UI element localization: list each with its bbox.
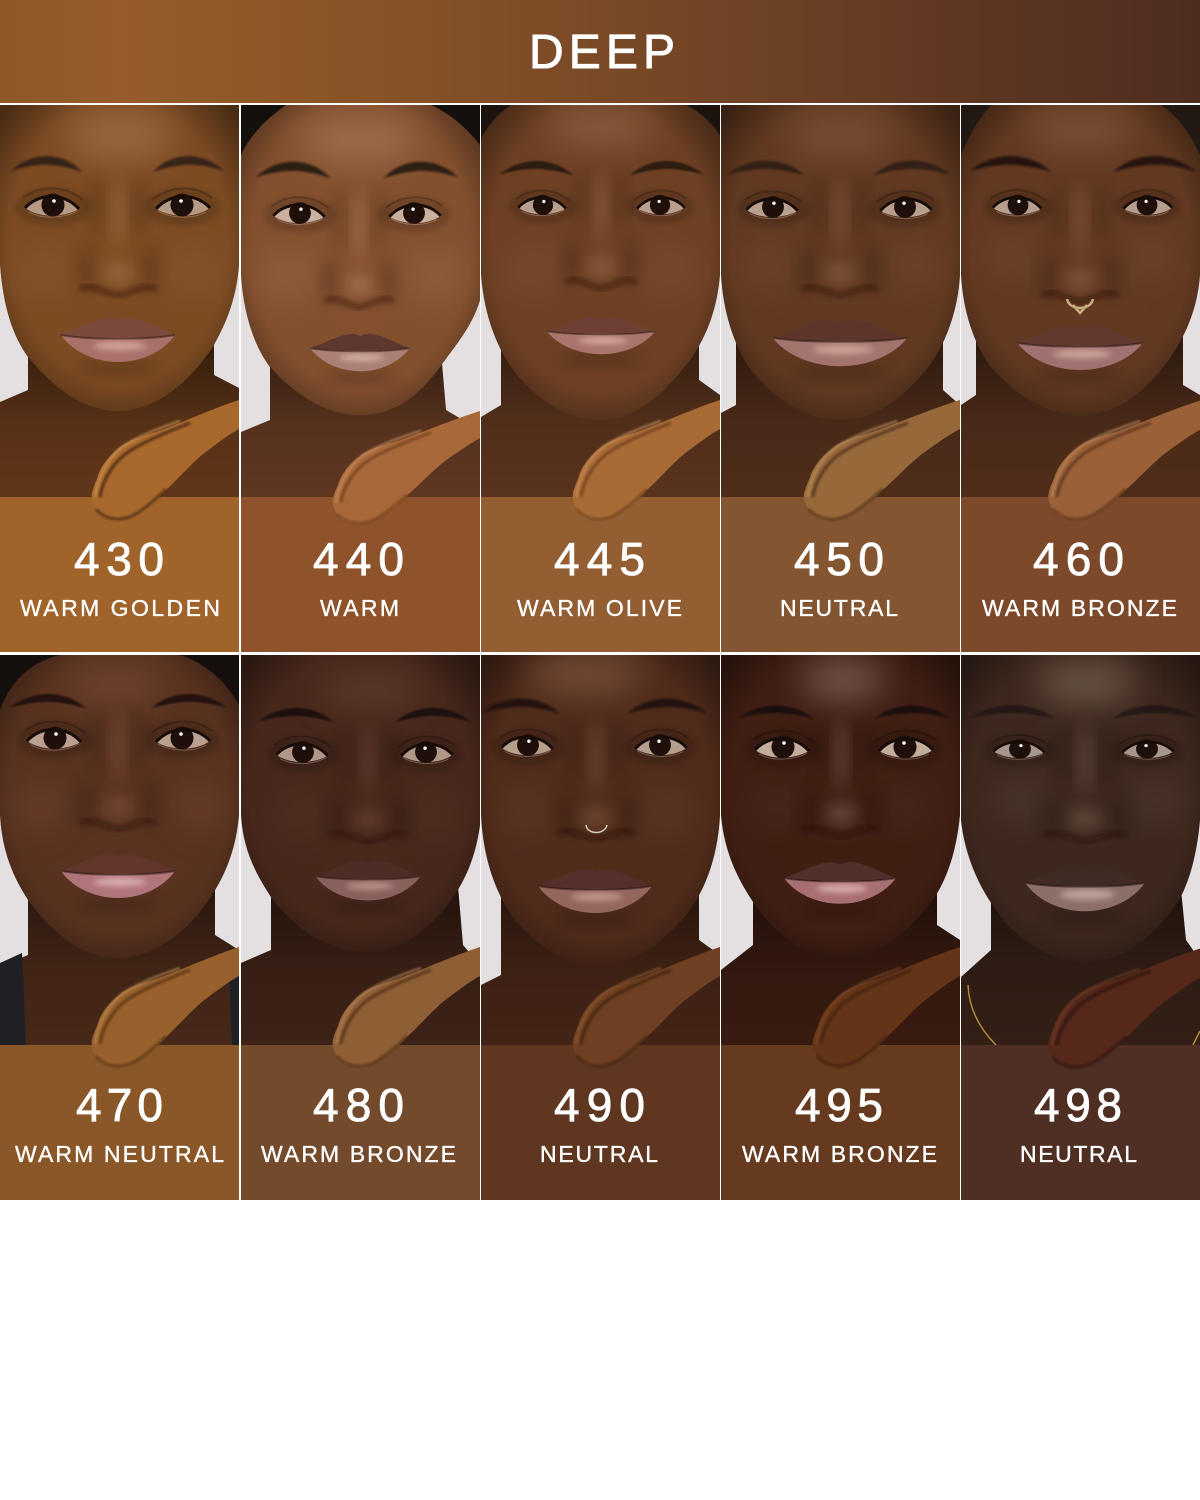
lips	[310, 334, 410, 383]
panel: shade 450	[721, 105, 960, 652]
shade number: 440	[313, 533, 404, 585]
photo: model 460	[961, 105, 1200, 497]
product swatch	[333, 411, 480, 524]
shade number: 495	[795, 1079, 883, 1131]
shade colour block	[241, 1045, 480, 1200]
product swatch	[813, 947, 960, 1067]
product swatch	[1048, 400, 1200, 520]
necklace	[968, 985, 1200, 1045]
hair	[0, 655, 239, 710]
hair	[961, 105, 1200, 155]
panel: shade 440	[241, 105, 480, 652]
hair	[481, 105, 720, 139]
nose	[554, 721, 638, 839]
panel: shade 460	[961, 105, 1200, 652]
shade colour block	[481, 1045, 720, 1200]
photo: model 480	[241, 655, 480, 1047]
shade number: 430	[74, 533, 164, 585]
panel: shade 430	[0, 105, 239, 652]
panel: shade 490	[481, 655, 720, 1200]
garment	[0, 947, 239, 1047]
shade number: 445	[554, 533, 645, 585]
lips	[547, 317, 655, 366]
lips	[784, 862, 896, 917]
shade colour block	[961, 1045, 1200, 1200]
shade undertone: NEUTRAL	[1020, 1141, 1137, 1167]
shade undertone: WARM BRONZE	[982, 595, 1177, 621]
photo: model 430	[0, 105, 239, 497]
shade number: 490	[554, 1079, 645, 1131]
shade colour block	[481, 497, 720, 652]
product swatch	[92, 947, 239, 1067]
shade number: 498	[1034, 1079, 1122, 1131]
eyes and brows	[256, 162, 458, 233]
shade undertone: WARM NEUTRAL	[15, 1141, 224, 1167]
photo: model 450	[721, 105, 960, 497]
shade colour block	[961, 497, 1200, 652]
shade number: 460	[1033, 533, 1124, 585]
eyes and brows	[11, 156, 224, 226]
photo: model 440	[241, 105, 480, 497]
panel: shade 470	[0, 655, 239, 1200]
nose	[1038, 183, 1122, 301]
photo: model 495	[721, 655, 960, 1047]
shade undertone: WARM BRONZE	[742, 1141, 937, 1167]
product swatch	[333, 947, 480, 1067]
nose	[798, 177, 882, 295]
panel: shade 480	[241, 655, 480, 1200]
product swatch	[1048, 948, 1200, 1068]
lips	[61, 318, 175, 376]
nose	[76, 177, 160, 295]
nose ring	[586, 825, 607, 832]
eyes and brows	[500, 161, 703, 223]
shade colour block	[241, 497, 480, 652]
eyes and brows	[970, 156, 1195, 224]
lips	[1017, 326, 1143, 384]
eyes and brows	[728, 161, 950, 227]
shade undertone: WARM GOLDEN	[20, 595, 220, 621]
eyes and brows	[482, 699, 706, 765]
shade undertone: WARM BRONZE	[261, 1141, 456, 1167]
product swatch	[92, 400, 239, 520]
product swatch	[804, 400, 960, 520]
eyes and brows	[11, 694, 226, 759]
shade undertone: WARM	[320, 595, 399, 621]
nose	[1040, 723, 1130, 841]
header band: DEEP	[0, 0, 1200, 103]
photo: model 470	[0, 655, 239, 1047]
nose	[326, 723, 410, 841]
shade undertone: WARM OLIVE	[517, 595, 682, 621]
lips	[773, 320, 907, 381]
photo: model 445	[481, 105, 720, 497]
shade colour block	[721, 497, 960, 652]
eyes and brows	[739, 705, 949, 768]
panel: shade 445	[481, 105, 720, 652]
product swatch	[573, 947, 720, 1067]
shade colour block	[0, 1045, 239, 1200]
lips	[1025, 865, 1145, 926]
lips	[316, 861, 420, 913]
hair	[241, 105, 480, 155]
nose ring	[1067, 299, 1093, 313]
nose	[799, 718, 883, 836]
shade colour block	[721, 1045, 960, 1200]
photo: model 498	[961, 655, 1200, 1047]
title: DEEP	[529, 26, 675, 79]
nose	[321, 189, 397, 307]
lips	[538, 869, 652, 927]
shade undertone: NEUTRAL	[540, 1141, 658, 1167]
panel: shade 498	[961, 655, 1200, 1200]
shade colour block	[0, 497, 239, 652]
shade number: 450	[794, 533, 884, 585]
shade undertone: NEUTRAL	[780, 595, 898, 621]
product swatch	[573, 400, 720, 520]
eyes and brows	[970, 705, 1197, 767]
lips	[61, 854, 175, 912]
nose	[76, 711, 160, 829]
photo: model 490	[481, 655, 720, 1047]
shade number: 480	[313, 1079, 404, 1131]
eyes and brows	[259, 708, 470, 772]
panel: shade 495	[721, 655, 960, 1200]
shade number: 470	[76, 1079, 163, 1131]
nose	[562, 170, 640, 288]
